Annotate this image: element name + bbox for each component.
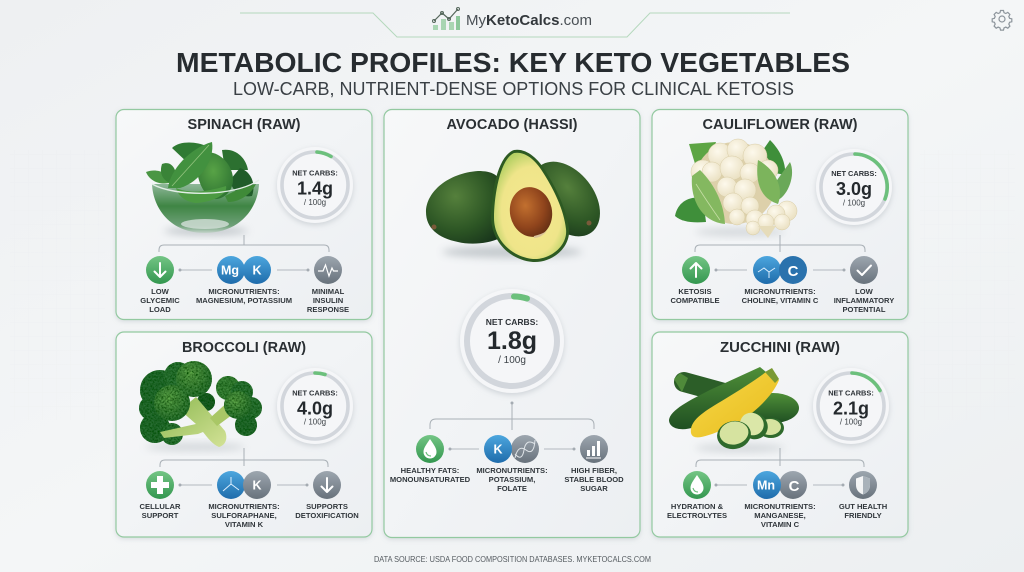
gauge: net carbs 3.0g: NET CARBS: xyxy=(831,169,877,178)
label: gut health friendly: FRIENDLY xyxy=(844,511,882,520)
icon: low glycemic load arrow xyxy=(146,256,174,284)
label: micronutrients: VITAMIN C xyxy=(761,520,800,529)
icon: insulin pulse xyxy=(314,256,342,284)
gauge: net carbs 4.0g: 4.0g xyxy=(297,398,333,418)
icon: logo chart xyxy=(432,8,460,30)
logo: MyKetoCalcs: MyKetoCalcs.com xyxy=(466,12,592,29)
label: supports detoxification: DETOXIFICATION xyxy=(295,511,359,520)
label: micronutrients: MICRONUTRIENTS: xyxy=(476,466,548,475)
arrows xyxy=(716,484,843,486)
label: micronutrients: MICRONUTRIENTS: xyxy=(744,287,816,296)
gauge: net carbs 1.8g: 1.8g xyxy=(487,327,537,355)
gauge: net carbs 1.4g: / 100g xyxy=(304,198,326,207)
label: high fiber: STABLE BLOOD xyxy=(564,475,624,484)
label: healthy fats: MONOUNSATURATED xyxy=(390,475,471,484)
heading: broccoli: BROCCOLI (RAW) xyxy=(182,340,306,356)
gauge: net carbs 3.0g xyxy=(816,149,892,225)
label: high fiber: SUGAR xyxy=(580,484,608,493)
connector xyxy=(160,448,328,467)
connector xyxy=(159,235,329,252)
icon: settings gear xyxy=(992,10,1012,30)
connector xyxy=(696,448,864,467)
icon: manganese and vitamin c xyxy=(753,471,807,499)
label: minimal insulin response: RESPONSE xyxy=(307,305,349,314)
label: micronutrients: POTASSIUM, xyxy=(489,475,535,484)
icon: manganese and vitamin c: Mn xyxy=(757,478,775,492)
icon: choline and vitamin c: C xyxy=(788,263,799,280)
panel: avocado xyxy=(384,110,640,538)
label: ketosis compatible: COMPATIBLE xyxy=(670,296,720,305)
icon: magnesium and potassium: K xyxy=(252,264,262,278)
label: low inflammatory potential: INFLAMMATORY xyxy=(834,296,894,305)
icon: ketosis up arrow xyxy=(682,256,710,284)
label: hydration and electrolytes: ELECTROLYTES xyxy=(667,511,727,520)
heading: spinach: SPINACH (RAW) xyxy=(188,117,301,133)
label: high fiber: HIGH FIBER, xyxy=(571,466,617,475)
subtitle: LOW-CARB, NUTRIENT-DENSE OPTIONS FOR CLINICAL KETOSIS xyxy=(233,79,794,99)
arrows xyxy=(180,269,308,271)
panel: cauliflower xyxy=(652,110,908,320)
image: spinach bowl xyxy=(146,142,259,235)
label: cellular support: CELLULAR xyxy=(140,502,181,511)
panel: broccoli xyxy=(116,332,372,537)
icon: magnesium and potassium: Mg xyxy=(221,264,239,278)
gauge: net carbs 2.1g: NET CARBS: xyxy=(828,388,874,398)
heading: avocado: AVOCADO (HASSI) xyxy=(446,117,578,133)
label: cellular support: SUPPORT xyxy=(142,511,179,520)
icon: choline and vitamin c xyxy=(753,256,807,284)
icon: healthy fats droplet xyxy=(416,435,444,463)
label: minimal insulin response: MINIMAL xyxy=(312,287,345,296)
label: low inflammatory potential: LOW xyxy=(855,287,874,296)
icon: cellular support plus xyxy=(146,471,174,499)
label: hydration and electrolytes: HYDRATION & xyxy=(671,502,724,511)
label: micronutrients: FOLATE xyxy=(497,484,527,493)
footer: data source: DATA SOURCE: USDA FOOD COMPOSITION DATABASES. MYKETOCALCS.COM xyxy=(374,555,651,564)
icon: potassium and folate: K xyxy=(493,442,503,456)
title: METABOLIC PROFILES: KEY KETO VEGETABLES xyxy=(176,47,850,78)
icon: sulforaphane and vitamin k xyxy=(217,471,271,499)
icon: detoxification arrow xyxy=(313,471,341,499)
gauge: net carbs 1.4g: NET CARBS: xyxy=(292,168,338,178)
gauge: net carbs 1.8g: NET CARBS: xyxy=(486,317,538,327)
icon: fiber bar chart xyxy=(580,435,608,463)
arrows xyxy=(180,484,307,486)
gauge: net carbs 1.4g: 1.4g xyxy=(297,178,333,198)
gauge: net carbs 4.0g xyxy=(277,368,353,444)
gauge: net carbs 1.8g: / 100g xyxy=(498,355,526,366)
label: low glycemic load: LOAD xyxy=(149,305,171,314)
image: zucchini xyxy=(669,367,799,452)
icon: manganese and vitamin c: C xyxy=(789,478,800,495)
label: micronutrients: MICRONUTRIENTS: xyxy=(208,287,280,296)
gauge: net carbs 2.1g xyxy=(813,368,889,444)
arrows xyxy=(450,448,574,450)
icon: potassium and folate xyxy=(484,435,539,463)
label: minimal insulin response: INSULIN xyxy=(313,296,343,305)
label: micronutrients: MICRONUTRIENTS: xyxy=(744,502,816,511)
heading: cauliflower: CAULIFLOWER (RAW) xyxy=(702,117,858,133)
label: low glycemic load: GLYCEMIC xyxy=(140,296,180,305)
arrows xyxy=(716,269,844,271)
icon: gut health shield xyxy=(849,471,877,499)
image: cauliflower xyxy=(675,139,797,238)
icon: hydration droplet xyxy=(683,471,711,499)
label: low inflammatory potential: POTENTIAL xyxy=(842,305,886,314)
gauge: net carbs 3.0g: / 100g xyxy=(843,198,865,208)
panel: spinach xyxy=(116,110,372,320)
gauge: net carbs 1.4g xyxy=(277,147,353,223)
image: avocado xyxy=(426,149,614,262)
icon: magnesium and potassium xyxy=(217,256,271,284)
label: supports detoxification: SUPPORTS xyxy=(306,502,348,511)
label: micronutrients: CHOLINE, VITAMIN C xyxy=(742,296,819,305)
label: low glycemic load: LOW xyxy=(151,287,170,296)
gauge: net carbs 3.0g: 3.0g xyxy=(836,179,872,199)
label: micronutrients: MICRONUTRIENTS: xyxy=(208,502,280,511)
gauge: net carbs 4.0g: / 100g xyxy=(304,418,326,426)
gauge: net carbs 2.1g: / 100g xyxy=(840,418,862,426)
heading: zucchini: ZUCCHINI (RAW) xyxy=(720,340,840,356)
logo: MyKetoCalcs xyxy=(432,8,592,30)
image: broccoli xyxy=(139,361,262,451)
label: micronutrients: MAGNESIUM, POTASSIUM xyxy=(196,296,292,305)
label: micronutrients: VITAMIN K xyxy=(225,520,264,529)
gauge: net carbs 2.1g: 2.1g xyxy=(833,398,869,418)
label: gut health friendly: GUT HEALTH xyxy=(839,502,887,511)
icon: low inflammatory check xyxy=(850,256,878,284)
label: micronutrients: SULFORAPHANE, xyxy=(211,511,277,520)
label: micronutrients: MANGANESE, xyxy=(754,511,806,520)
gauge: net carbs 1.8g xyxy=(460,289,564,393)
label: healthy fats: HEALTHY FATS: xyxy=(401,466,459,475)
connector xyxy=(430,403,594,430)
connector xyxy=(695,235,865,252)
icon: sulforaphane and vitamin k: K xyxy=(252,478,262,492)
label: ketosis compatible: KETOSIS xyxy=(678,287,712,296)
panel: zucchini xyxy=(652,332,908,537)
gauge: net carbs 4.0g: NET CARBS: xyxy=(292,388,338,398)
